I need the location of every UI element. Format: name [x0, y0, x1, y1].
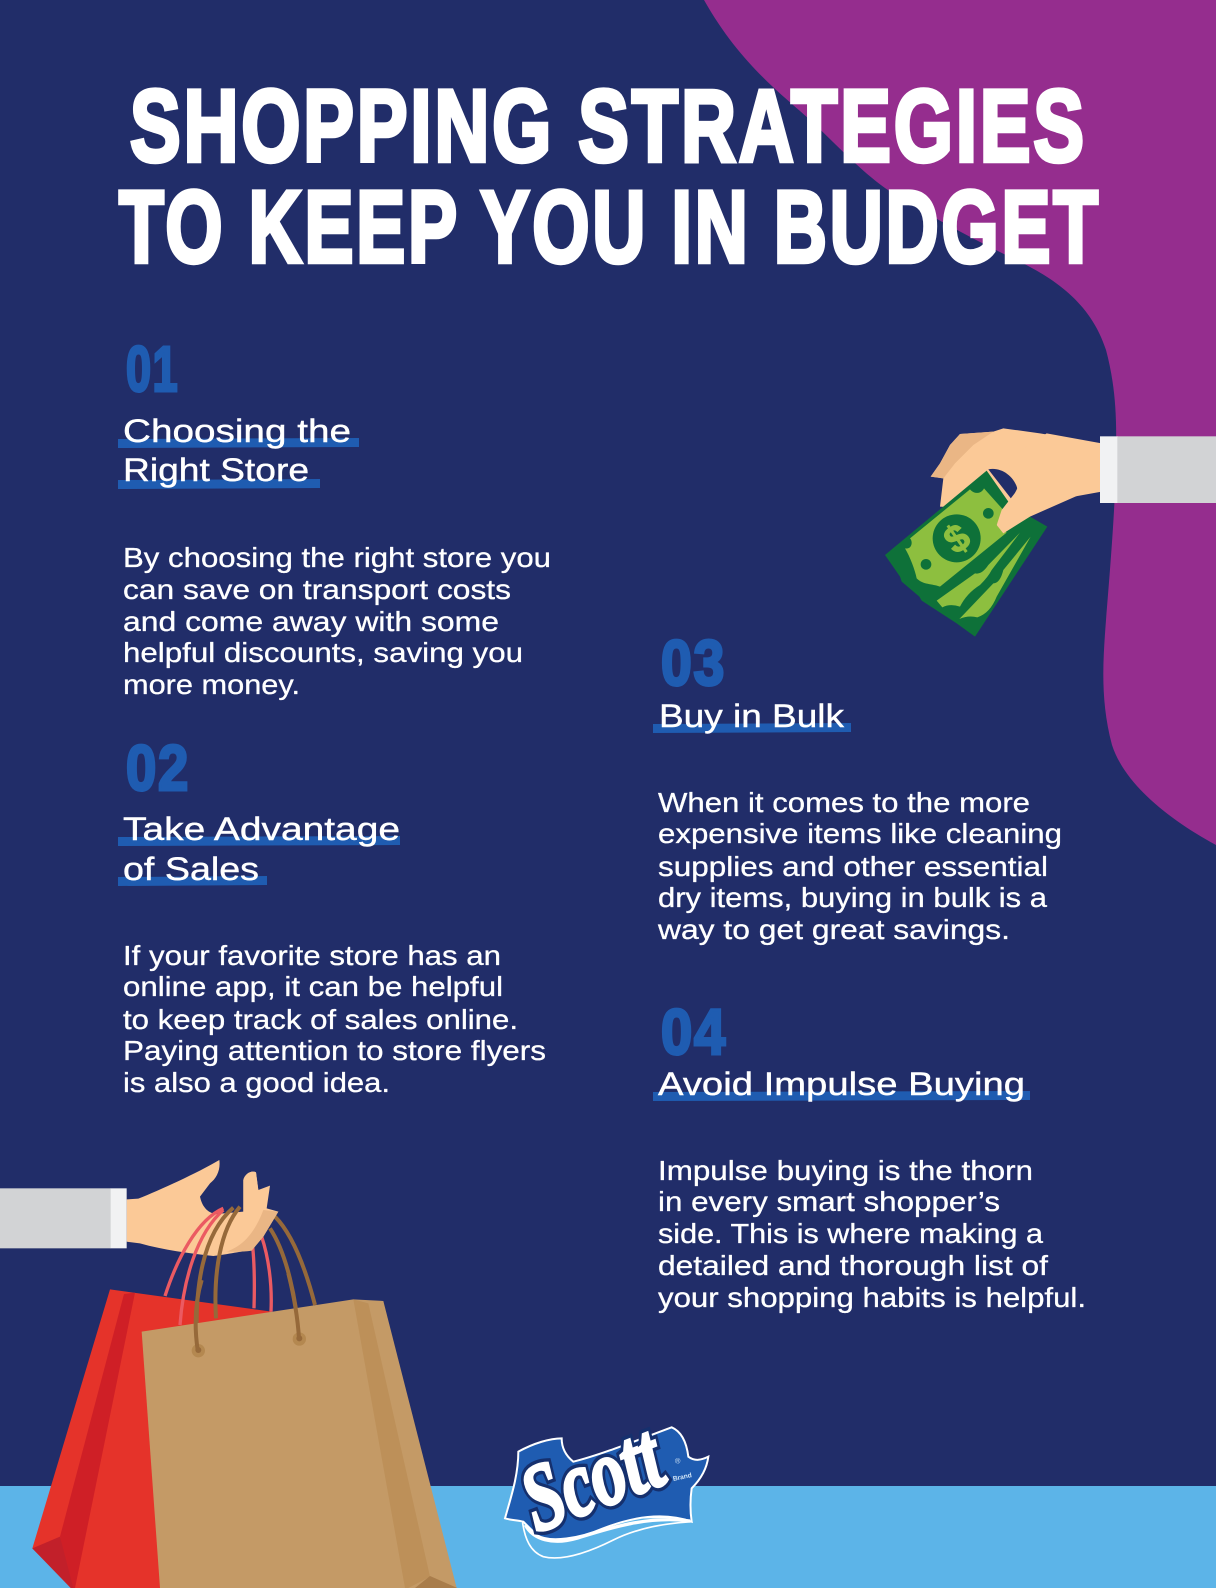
body 04: [658, 1155, 1086, 1313]
body 02: [123, 940, 546, 1098]
body 03: expensive items like cleaning: [658, 818, 1062, 849]
body 01: By choosing the right store you: [123, 542, 551, 573]
body 01: more money.: [123, 669, 300, 700]
light blue footer band: [0, 1486, 1216, 1588]
heading 04: Avoid Impulse Buying: [658, 1066, 1025, 1102]
shirt cuff: [1100, 436, 1118, 503]
body 01: can save on transport costs: [123, 574, 511, 605]
body 03: dry items, buying in bulk is a: [658, 882, 1047, 913]
heading 02: Take Advantage: [123, 811, 400, 847]
body 03: way to get great savings.: [657, 914, 1010, 945]
logo brand tag: Brand: [672, 1472, 693, 1483]
dollar bills: [885, 471, 1047, 637]
heading underline 04: [653, 1091, 1030, 1101]
number 01: 01: [126, 333, 179, 405]
title: [119, 69, 1101, 284]
right brown handles: [270, 1217, 315, 1338]
right red handles: [253, 1237, 271, 1312]
body 02: If your favorite store has an: [123, 940, 501, 971]
heading underlines 01: [118, 438, 359, 489]
heading underlines 02: [118, 836, 400, 886]
hand: [127, 1160, 278, 1256]
front finger: [243, 1172, 263, 1227]
logo wave: [523, 1517, 692, 1558]
heading underline 03: [653, 723, 851, 733]
logo wordmark outline: Scott: [506, 1402, 678, 1552]
body 02: Paying attention to store flyers: [123, 1035, 546, 1066]
body 02: to keep track of sales online.: [123, 1004, 518, 1035]
body 02: is also a good idea.: [123, 1067, 390, 1098]
thumb and palm: [997, 433, 1102, 533]
section 02: take advantage of sales: [118, 732, 546, 1098]
tan bag: [142, 1273, 457, 1588]
registered mark: ®: [675, 1456, 681, 1465]
body 04: your shopping habits is helpful.: [658, 1282, 1086, 1313]
body 03: When it comes to the more: [658, 787, 1030, 818]
body 03: [657, 787, 1062, 945]
heading 03: Buy in Bulk: [659, 698, 845, 734]
heading 01: Choosing the: [123, 413, 351, 449]
logo banner: [505, 1427, 708, 1539]
body 01: helpful discounts, saving you: [123, 637, 523, 668]
body 01: and come away with some: [123, 606, 499, 637]
heading 01: Right Store: [123, 452, 309, 488]
bag eyelets: [192, 1344, 205, 1357]
body 02: online app, it can be helpful: [123, 971, 503, 1002]
shirt sleeve: [1117, 436, 1216, 503]
gap between thumb and fingers: [988, 469, 1017, 499]
number 03: 03: [661, 627, 726, 699]
shirt sleeve: [0, 1188, 111, 1248]
shirt cuff: [111, 1188, 127, 1248]
body 01: [123, 542, 551, 700]
left handles over palm: [165, 1207, 240, 1350]
heading 02: [123, 811, 400, 887]
body 03: supplies and other essential: [658, 851, 1048, 882]
section 01: choosing the right store: [118, 333, 551, 700]
logo white swoosh: [525, 1520, 690, 1541]
body 04: detailed and thorough list of: [658, 1250, 1048, 1281]
heading 01: [123, 413, 351, 488]
number 04: 04: [661, 996, 727, 1068]
dollar medallion: [933, 514, 981, 562]
body 04: side. This is where making a: [658, 1218, 1043, 1249]
section 04: avoid impulse buying: [653, 996, 1086, 1313]
icon: hand holding shopping bags: [0, 1160, 457, 1588]
logo wordmark: Scott: [506, 1402, 678, 1552]
dollar bills: $: [936, 515, 978, 563]
Scott brand logo: [505, 1402, 708, 1558]
hand fingers: [931, 428, 1102, 510]
body 04: in every smart shopper’s: [658, 1186, 1000, 1217]
heading 02: of Sales: [123, 851, 259, 887]
body 04: Impulse buying is the thorn: [658, 1155, 1033, 1186]
purple blob background: [704, 0, 1216, 845]
number 02: 02: [126, 732, 190, 804]
section 03: buy in bulk: [653, 627, 1062, 945]
red bag: [32, 1289, 272, 1588]
icon: hand holding money: [885, 428, 1216, 637]
